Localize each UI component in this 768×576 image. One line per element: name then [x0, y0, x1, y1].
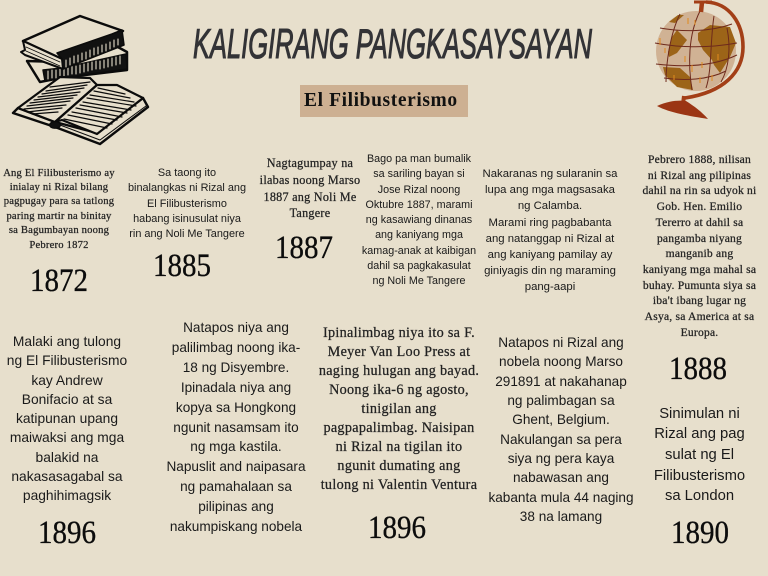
- icon: globe: [654, 0, 745, 119]
- text block: Calamba description: giniyagis din ng maraming: [484, 265, 616, 277]
- text block: Hongkong printing: nakumpiskang nobela: [170, 519, 302, 534]
- text block: 1888 description: pangamba niyang: [657, 232, 742, 245]
- text block: 1887 return description: kamag-anak at kaibigan: [362, 244, 476, 256]
- text block: novel finished: Natapos ni Rizal ang: [498, 335, 624, 350]
- text block: 1872 description: Ang El Filibusterismo ay: [3, 168, 115, 178]
- text block: Ghent press: pagpapalimbag. Naisipan: [323, 420, 475, 436]
- text block: Hongkong printing: kopya sa Hongkong: [176, 400, 296, 415]
- text block: novel finished: Ghent, Belgium.: [512, 412, 610, 427]
- text block: 1890 description: sulat ng El: [665, 447, 734, 463]
- text block: 1896 Andrew Bonifacio: Bonifacio at sa: [22, 392, 112, 407]
- text block: 1896 Andrew Bonifacio: maiwaksi ang mga: [10, 430, 124, 445]
- text block: 1888 description: [642, 153, 756, 339]
- text block: 1888 description: ni Rizal ang pilipinas: [648, 169, 751, 182]
- text block: 1896 Andrew Bonifacio: paghihimagsik: [23, 488, 111, 503]
- icon: stack of books with an open book: [12, 14, 150, 146]
- text block: 1888 description: manganib ang: [666, 247, 733, 260]
- text block: 1885 description: binalangkas ni Rizal ang: [128, 182, 246, 194]
- text block: 1888 description: iba't ibang lugar ng: [653, 294, 746, 307]
- text block: 1885 description: habang isinusulat niya: [133, 213, 241, 225]
- text block: novel finished: kabanta mula 44 naging: [488, 490, 634, 505]
- text block: 1872 description: pagpugay para sa tatlong: [4, 196, 114, 207]
- year: 1888: 1888: [669, 351, 727, 387]
- text block: 1887 return description: ang kaniyang mga: [375, 229, 463, 241]
- text block: 1885 description: rin ang Noli Me Tangere: [129, 228, 245, 240]
- year: 1885: 1885: [153, 248, 211, 284]
- text block: Calamba description: ang kaniyang pamilay ay: [488, 249, 612, 261]
- text block: 1885 description: Sa taong ito: [158, 167, 216, 179]
- text block: Ghent press: tinigilan ang: [361, 401, 437, 417]
- text block: 1887 return description: Oktubre 1887, marami: [366, 199, 472, 211]
- text block: novel finished: ng palimbagan sa: [507, 393, 615, 408]
- text block: Hongkong printing: ngunit nasamsam ito: [173, 420, 299, 435]
- text block: Hongkong printing: palilimbag noong ika-: [172, 340, 300, 355]
- text block: 1887 description: Tangere: [290, 206, 330, 220]
- text block: Ghent press: ngunit dumating ang: [337, 458, 461, 474]
- text block: 1888 description: dahil na rin sa udyok ni: [643, 184, 756, 197]
- text block: novel finished: nobela noong Marso: [499, 354, 623, 369]
- text block: 1890 description: [654, 406, 745, 504]
- text block: 1888 description: Asya, sa America at sa: [645, 310, 754, 323]
- text block: 1888 description: Europa.: [681, 326, 718, 339]
- text block: 1888 description: Tererro at dahil sa: [656, 216, 743, 229]
- text block: novel finished: siya ng pera kaya: [508, 451, 614, 466]
- year: 1887: 1887: [275, 230, 333, 266]
- text block: 1887 return description: Jose Rizal noong: [378, 184, 460, 196]
- text block: Calamba description: [483, 168, 618, 293]
- text block: 1896 Andrew Bonifacio: [7, 334, 127, 503]
- text block: novel finished: 291891 at nakahanap: [495, 374, 627, 389]
- text block: 1888 description: kaniyang mga mahal sa: [643, 263, 756, 276]
- text block: novel finished: [488, 335, 634, 524]
- text block: Calamba description: ang natanggap ni Rizal at: [486, 233, 614, 245]
- text block: Ghent press: Noong ika-6 ng agosto,: [329, 382, 469, 398]
- text block: 1896 Andrew Bonifacio: kay Andrew: [31, 373, 103, 388]
- text block: 1887 return description: [362, 153, 476, 287]
- year: 1896 left: 1896: [38, 515, 96, 551]
- text block: 1872 description: Pebrero 1872: [29, 240, 89, 251]
- text block: Hongkong printing: pilipinas ang: [198, 499, 274, 514]
- text block: 1887 return description: ng kasawiang dinanas: [366, 214, 472, 226]
- text block: 1872 description: sa Bagumbayan noong: [9, 225, 109, 236]
- text block: 1890 description: Rizal ang pag: [654, 426, 745, 442]
- text block: 1887 return description: ng Noli Me Tangere: [372, 275, 466, 287]
- text block: 1896 Andrew Bonifacio: ng El Filibusterismo: [7, 353, 127, 368]
- text block: 1890 description: sa London: [665, 488, 734, 504]
- subtitle badge: [300, 85, 468, 117]
- text block: Hongkong printing: Natapos niya ang: [183, 320, 289, 335]
- text block: Hongkong printing: Ipinadala niya ang: [181, 380, 291, 395]
- text block: Ghent press: [319, 325, 479, 493]
- text block: Hongkong printing: Napuslit and naipasara: [166, 459, 306, 474]
- text block: Ghent press: Meyer Van Loo Press at: [328, 344, 470, 360]
- text block: 1888 description: buhay. Pumunta siya sa: [643, 279, 756, 292]
- year: 1890: 1890: [671, 515, 729, 551]
- text block: 1888 description: Pebrero 1888, nilisan: [648, 153, 751, 166]
- text block: 1887 description: Nagtagumpay na: [267, 156, 353, 170]
- text block: Ghent press: tulong ni Valentin Ventura: [321, 477, 477, 493]
- text block: Calamba description: Nakaranas ng sularanin sa: [483, 168, 617, 180]
- text block: 1887 return description: dahil sa pagkakasulat: [367, 260, 471, 272]
- text block: 1890 description: Filibusterismo: [654, 468, 745, 484]
- text block: 1896 Andrew Bonifacio: nakasasagabal sa: [11, 469, 123, 484]
- text block: 1896 Andrew Bonifacio: balakid na: [36, 450, 98, 465]
- year: 1896 center: 1896: [368, 510, 426, 546]
- text block: Ghent press: ni Rizal na tigilan ito: [336, 439, 462, 455]
- text block: novel finished: nabawasan ang: [513, 470, 609, 485]
- text block: 1887 return description: Bago pa man bumalik: [367, 153, 471, 165]
- text block: Calamba description: ng Calamba.: [518, 200, 582, 212]
- text block: 1887 description: ilabas noong Marso: [260, 173, 360, 187]
- text block: novel finished: Nakulangan sa pera: [500, 432, 622, 447]
- text block: 1872 description: paring martir na binitay: [6, 211, 112, 222]
- text block: Ghent press: Ipinalimbag niya ito sa F.: [323, 325, 475, 341]
- text block: Hongkong printing: ng mga kastila.: [190, 439, 282, 454]
- text block: 1872 description: [3, 168, 115, 251]
- subtitle badge: El Filibusterismo: [304, 90, 458, 110]
- text block: 1887 description: 1887 ang Noli Me: [263, 190, 357, 204]
- text block: 1896 Andrew Bonifacio: Malaki ang tulong: [13, 334, 121, 349]
- text block: Calamba description: lupa ang mga magsasaka: [485, 184, 615, 196]
- text block: Hongkong printing: [166, 320, 306, 534]
- text block: 1896 Andrew Bonifacio: katipunan upang: [16, 411, 118, 426]
- text block: 1885 description: El Filibusterismo: [147, 198, 227, 210]
- text block: Ghent press: naging hulugan ang bayad.: [319, 363, 479, 379]
- text block: 1872 description: inialay ni Rizal bilang: [10, 182, 108, 193]
- text block: 1888 description: Gob. Hen. Emilio: [657, 200, 742, 213]
- text block: 1887 description: [260, 156, 360, 220]
- text block: 1887 return description: sa sariling bayan si: [373, 168, 465, 180]
- text block: Calamba description: pang-aapi: [525, 281, 575, 293]
- text block: novel finished: 38 na lamang: [520, 509, 602, 524]
- text block: 1885 description: [128, 167, 246, 240]
- year: 1872: 1872: [30, 263, 88, 299]
- text block: Hongkong printing: ng pamahalaan sa: [180, 479, 292, 494]
- text block: Hongkong printing: 18 ng Disyembre.: [183, 360, 289, 375]
- text block: Calamba description: Marami ring pagbabanta: [489, 217, 611, 229]
- text block: 1890 description: Sinimulan ni: [659, 406, 740, 422]
